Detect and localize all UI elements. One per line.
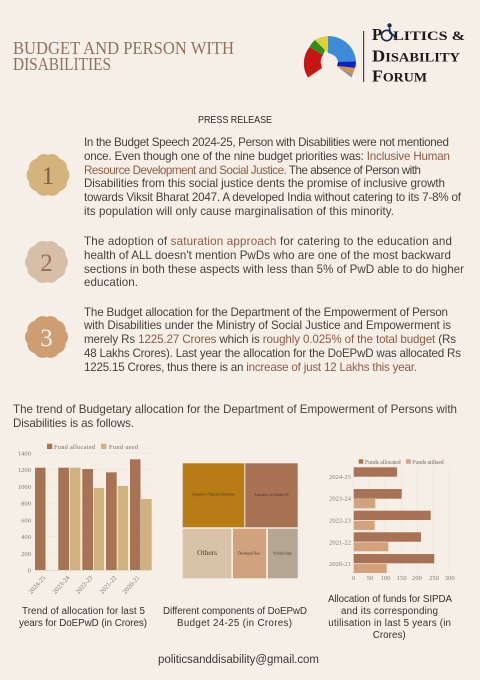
text block: trend intro: The trend of Budgetary allocation for the Department of Empowerment of Persons with [13,403,457,416]
icon: badge 2: 2 [40,250,53,277]
bar chart: trend of allocation: 2023-24 [52,574,72,596]
bar chart: SIPDA funds: 200 [412,575,423,582]
bar chart: SIPDA funds: 2022-23 [329,518,352,525]
chart legend: Funds allocated [365,460,401,466]
bar chart: trend of allocation: 600 [21,517,32,524]
bar chart: SIPDA funds: 2020-21 [329,561,351,568]
bar chart: trend of allocation: 2022-23 [75,574,95,596]
text block: point 3: 1225.15 Crores, thus there is an increase of just 12 Lakhs this year. [84,361,417,374]
text block: point 1: Disabilities from this social justice dents the promise of inclusive growth [84,177,445,190]
caption: SIPDA chart: Crores) [373,630,406,641]
bar chart: SIPDA funds [329,459,455,582]
logo text: DISABILITY [372,47,461,66]
treemap: DoEPwD components [183,463,298,578]
text block: point 3: The Budget allocation for the Department of the Empowerment of Person [84,306,448,319]
text block: point 1: once. Even though one of the nine budget priorities was: Inclusive Human [84,150,450,163]
bar chart: SIPDA funds: 100 [381,575,391,582]
chart legend [359,459,444,466]
bar chart: trend of allocation: 2020-21 [122,575,141,596]
title [13,38,234,74]
text block: point 1: In the Budget Speech 2024-25, Person with Disabilities were not mentioned [84,136,449,149]
bar chart: trend of allocation: 800 [21,501,32,508]
icon: badge 2 [25,241,68,283]
icon: badge 1: 1 [42,163,54,190]
bar chart: SIPDA funds: 2023-24 [329,496,352,503]
contact email: politicsanddisability@gmail.com [158,654,319,666]
text block: point 1 [84,136,462,218]
chart legend: Fund used [109,444,139,451]
text block: point 2: health of ALL doesn't mention PwDs who are one of the most backward [84,249,451,262]
bar chart: trend of allocation: 2021-22 [99,575,118,596]
bar chart: SIPDA funds: 2024-25 [329,474,352,481]
caption: trend chart: years for DoEPwD (in Crores) [19,618,147,629]
treemap: DoEPwD components: Deendayal Disa [238,552,260,556]
treemap: DoEPwD components: Assistance to Disabled P. [254,493,289,497]
treemap: DoEPwD components: Others [197,548,217,557]
icon: badge 1 [26,154,70,196]
bar chart: SIPDA funds: 0 [352,575,356,582]
icon: parliament semicircle [304,36,356,78]
text block: point 2: education. [84,276,138,289]
caption: trend chart: Trend of allocation for last 5 [22,606,146,617]
text block: point 3: 48 Lakhs Crores). Last year the allocation for the DoEPwD was allocated Rs [84,347,461,360]
panel: point 1 [26,136,462,218]
caption: treemap: Different components of DoEPwD [163,606,307,617]
treemap: DoEPwD components: Support to National Institutes [192,492,236,496]
logo text: LITICS & [393,28,465,43]
bar chart: SIPDA funds: 300 [445,575,455,582]
icon: badge 3: 3 [40,325,53,352]
bar chart: trend of allocation: 400 [21,534,32,541]
text block: trend intro [13,403,457,430]
bar chart: trend of allocation: 0 [28,568,32,574]
title: DISABILITIES [13,54,111,74]
icon: badge 3 [25,316,68,358]
treemap: DoEPwD components: Scholarships [273,552,293,556]
bar chart: trend of allocation: 1000 [18,484,32,491]
icon: wheelchair user in the letter O [382,23,396,41]
bar chart: SIPDA funds: 150 [397,575,407,582]
logo: Politics & Disability Forum [304,23,465,86]
chart legend [47,444,139,451]
caption: trend chart [19,606,147,629]
text block: point 3: with Disabilities under the Ministry of Social Justice and Empowerment is [83,319,451,332]
text block: point 3: merely Rs 1225.27 Crores which is roughly 0.025% of the total budget (Rs [84,333,456,346]
bar chart: trend of allocation: 1200 [18,467,32,474]
panel: point 2 [25,235,464,289]
bar chart: SIPDA funds: 2021-22 [329,540,351,547]
panel: point 3 [25,306,461,374]
bar chart: SIPDA funds: 250 [429,575,440,582]
heading: press release: PRESS RELEASE [198,115,272,126]
logo text: FORUM [372,67,427,86]
text block: point 2: sections in both these aspects with less than 5% of PwD able to do higher [84,263,464,276]
caption: SIPDA chart: Allocation of funds for SIPDA [328,594,452,605]
logo text: P [372,25,382,44]
bar chart: trend of allocation: 200 [21,551,32,558]
text block: point 2 [84,235,464,289]
title: BUDGET AND PERSON WITH [13,38,234,58]
caption: SIPDA chart [328,594,452,641]
logo text [372,25,465,86]
bar chart: trend of allocation: 1400 [18,450,32,458]
text block: point 2: The adoption of saturation approach for catering to the education and [84,235,452,248]
chart legend: Fund allocated [54,444,96,451]
bar chart: trend of allocation: 2024-25 [28,574,48,596]
text block: point 3 [83,306,461,374]
text block: trend intro: Disabilities is as follows. [13,417,134,430]
bar chart: trend of allocation [18,444,152,596]
caption: SIPDA chart: utilisation in last 5 years (in [328,618,451,629]
text block: point 1: towards Viksit Bharat 2047. A developed India without catering to its 7-8% of [84,191,462,204]
caption: treemap [163,606,307,629]
caption: treemap: Budget 24-25 (in Crores) [177,618,292,629]
text block: point 1: its population will only cause marginalisation of this minority. [84,205,394,218]
caption: SIPDA chart: and its corresponding [341,606,438,617]
text block: point 1: Resource Development and Social Justice. The absence of Person with [84,164,421,177]
bar chart: SIPDA funds: 50 [367,575,374,582]
chart legend: Funds utilised [412,460,444,466]
